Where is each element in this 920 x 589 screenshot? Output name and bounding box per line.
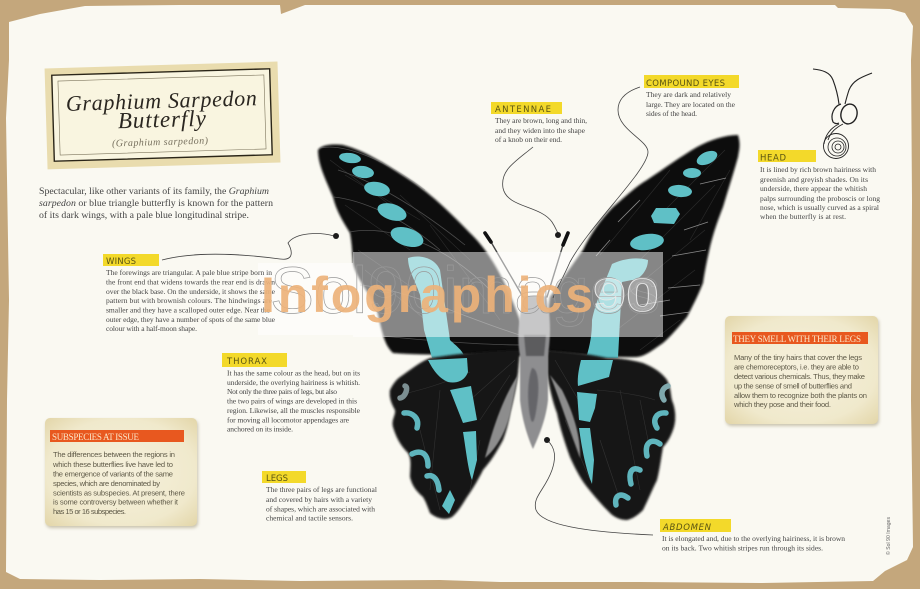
wings description: The forewings are triangular. A pale blue stripe born in — [106, 268, 272, 277]
head description: palps surrounding the proboscis or long — [760, 194, 880, 203]
thorax description: the two pairs of wings are developed in this — [227, 396, 357, 406]
wings description: the front end that widens towards the rear end is drawn — [106, 278, 275, 286]
text: legs — [262, 471, 377, 522]
leader line: abdomen — [535, 437, 653, 535]
right forewing — [546, 135, 740, 358]
leader line: wings — [162, 233, 339, 260]
body text: is some controversy between whether it — [53, 498, 179, 506]
thorax description: region. Likewise, all the muscles responsible — [227, 406, 361, 415]
antennae — [485, 233, 568, 297]
wings description: colour with a half-moon shape. — [106, 324, 197, 333]
text: head — [758, 150, 880, 221]
text: thorax — [222, 353, 361, 434]
thorax description: It has the same colour as the head, but on its — [227, 368, 360, 378]
label: abdomen: ABDOMEN — [662, 523, 712, 533]
thorax description: Not only the three pairs of legs, but also — [227, 387, 337, 396]
body — [518, 296, 550, 449]
watermark: text: 90 — [593, 269, 659, 321]
head description: It is lined by rich brown hairiness with — [760, 165, 876, 174]
label: head: HEAD — [760, 154, 786, 164]
intro text — [39, 186, 273, 221]
heading band — [50, 430, 184, 442]
label: antennae: ANTENNAE — [495, 105, 551, 115]
label: thorax: THORAX — [226, 357, 267, 367]
antennae description: and they widen into the shape — [495, 126, 586, 135]
wings description: pattern but with brownish colours. The hindwings are — [106, 296, 273, 305]
body text: up the sense of smell of butterflies and — [734, 382, 852, 390]
label: legs: LEGS — [266, 474, 288, 484]
text: compound eyes — [644, 75, 739, 118]
thorax description: for moving all locomotor appendages are — [227, 416, 350, 424]
abdomen description: on its back. Two whitish stripes run through its sides. — [662, 544, 823, 552]
text: wings — [103, 254, 276, 333]
thorax description: anchored on its inside. — [227, 424, 293, 434]
text: abdomen — [660, 519, 845, 552]
antennae description — [495, 116, 587, 144]
body text: allow them to recognize both the plants on — [734, 391, 867, 400]
body text: has 15 or 16 subspecies. — [53, 507, 126, 516]
legs description: The three pairs of legs are functional — [266, 485, 377, 494]
wings description — [106, 268, 276, 333]
label: compound eyes: COMPOUND EYES — [646, 79, 725, 89]
title: (Graphium sarpedon) — [112, 136, 209, 149]
body text: the emergence of variants of the same — [53, 470, 173, 478]
icon: butterfly head with spiral proboscis — [813, 69, 872, 158]
left hindwing — [390, 350, 520, 519]
butterfly illustration — [318, 135, 740, 520]
head description — [760, 165, 880, 221]
credit: © Sol 90 Images — [885, 516, 892, 555]
right hindwing — [547, 350, 675, 520]
heading band: SUBSPECIES AT ISSUE — [52, 432, 140, 442]
label: wings — [103, 254, 159, 267]
panel: they smell with their legs — [725, 316, 879, 426]
antennae description: of a knob on their end. — [495, 135, 562, 144]
compound eyes description: sides of the head. — [646, 109, 697, 118]
left forewing — [318, 145, 528, 358]
thorax description — [227, 368, 361, 434]
thorax description: underside, the overlying hairiness is whitish. — [227, 378, 360, 387]
head description: when the butterfly is at rest. — [760, 212, 846, 221]
label: abdomen — [660, 519, 731, 533]
abdomen description: It is elongated and, due to the overlying hairiness, it is brown — [662, 534, 845, 543]
legs description: chemical and tactile sensors. — [266, 514, 353, 522]
panel: title label — [45, 62, 280, 169]
leader line: compound eyes — [553, 87, 648, 298]
antennae description: They are brown, long and thin, — [495, 116, 587, 125]
body text: which they pose and their food. — [733, 400, 831, 409]
compound eyes description: large. They are located on the — [646, 100, 736, 109]
wings description: over the black base. On the underside, it shows the same — [106, 287, 276, 296]
watermark: text: Infographics — [261, 267, 593, 323]
watermark: translucent band — [353, 252, 663, 337]
title: Graphium Sarpedon — [66, 85, 257, 116]
title: Butterfly — [117, 106, 207, 133]
leader line: antennae — [503, 147, 561, 238]
head description: greenish and greyish shades. On its — [760, 175, 868, 184]
intro text: sarpedon or blue triangle butterfly is known for the pattern — [39, 198, 273, 209]
body text: The differences between the regions in — [53, 450, 175, 459]
body text — [52, 450, 185, 516]
watermark: text: Sol90images — [270, 253, 660, 327]
body text: Many of the tiny hairs that cover the legs — [734, 353, 862, 362]
body text: detect various chemicals. Thus, they make — [734, 372, 865, 381]
body text — [733, 353, 867, 409]
body text: species, which are denominated by — [53, 479, 160, 488]
body text: are chemoreceptors, i.e. they are able to — [734, 362, 859, 372]
intro text: of its dark wings, with a pale blue longitudinal stripe. — [39, 210, 249, 221]
compound eyes description — [646, 90, 736, 118]
title — [66, 85, 257, 149]
abdomen description — [662, 534, 845, 552]
compound eyes description: They are dark and relatively — [646, 90, 731, 99]
wings description: smaller and they have a scalloped outer edge. Near the — [106, 306, 271, 314]
wings description: outer edge, they have a number of spots of the same blue — [106, 315, 276, 324]
panel: subspecies at issue — [45, 418, 198, 528]
legs description: and covered by hairs with a variety — [266, 495, 372, 504]
legs description — [266, 485, 377, 522]
intro text: Spectacular, like other variants of its family, the Graphium — [39, 186, 269, 197]
label: wings: WINGS — [106, 257, 136, 267]
legs description: of shapes, which are associated with — [266, 504, 375, 514]
head description: nose, which is usually curved as a spiral — [760, 203, 879, 212]
text: antennae — [491, 102, 587, 144]
body text: scientists as subspecies. At present, there — [53, 488, 185, 498]
body text: which these butterflies live have led to — [52, 460, 173, 469]
head description: underside, there appear the whitish — [760, 184, 867, 193]
heading band: THEY SMELL WITH THEIR LEGS — [733, 334, 861, 344]
